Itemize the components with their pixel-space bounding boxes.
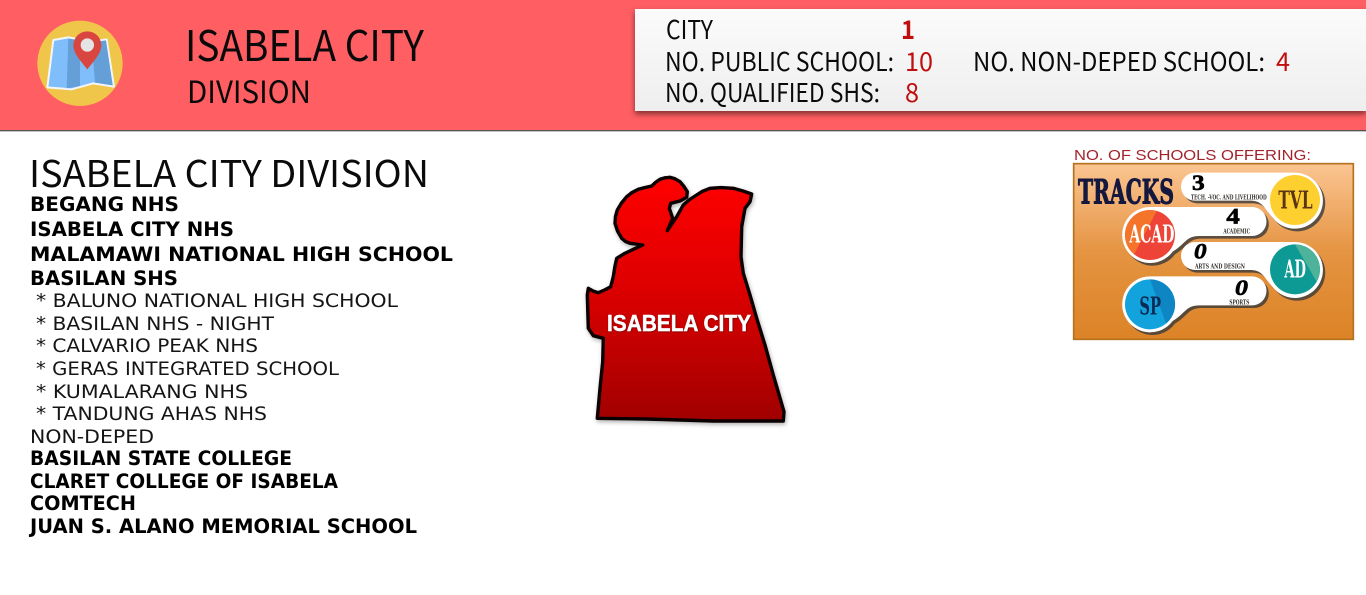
sub-list: Basilan SHS schools (36, 290, 398, 425)
sub-list: Basilan SHS schools: * BALUNO NATIONAL HIGH SCHOOL (36, 290, 398, 312)
heading: Isabela City Division: ISABELA CITY DIVISION (29, 144, 429, 198)
subtitle: Division: DIVISION (187, 67, 311, 112)
icon: map with location pin (37, 21, 123, 106)
track: TVL: TECH. -VOC. AND LIVELIHOOD (1191, 194, 1267, 201)
heading: number of schools offering: NO. OF SCHOOLS OFFERING: (1074, 147, 1311, 164)
list: non-DepEd schools: BASILAN STATE COLLEGE (30, 447, 292, 470)
track: AD: AD (1284, 255, 1306, 284)
list: public schools: ISABELA CITY NHS (30, 218, 234, 241)
stat: non-DepEd schools: NO. NON-DEPED SCHOOL: (973, 42, 1265, 79)
stat: non-DepEd schools: 4 (1276, 42, 1290, 79)
sub-list: Basilan SHS schools: * KUMALARANG NHS (36, 381, 248, 403)
track: TVL: TVL (1278, 185, 1313, 214)
track: SP: 0 (1235, 275, 1248, 300)
stat: city: 1 (901, 10, 915, 47)
sub-list: Basilan SHS schools: * GERAS INTEGRATED SCHOOL (36, 358, 339, 380)
stat: city: CITY (666, 10, 713, 47)
list: public schools (30, 193, 453, 425)
map label: ISABELA CITY (607, 310, 751, 336)
list: non-DepEd schools: JUAN S. ALANO MEMORIAL SCHOOL (28, 515, 417, 538)
list: public schools: BEGANG NHS (30, 193, 179, 216)
stat: city (666, 10, 915, 47)
heading: Tracks: TRACKS (1078, 172, 1174, 211)
track: ACAD: 4 (1226, 203, 1240, 228)
track: AD: 0 (1194, 238, 1207, 263)
track: ACAD: ACAD (1129, 220, 1174, 249)
sub-list: Basilan SHS schools: * BASILAN NHS - NIGHT (36, 313, 274, 335)
track: ACAD (1122, 203, 1269, 266)
track: ACAD: ACADEMIC (1223, 228, 1250, 235)
list: public schools: MALAMAWI NATIONAL HIGH SCHOOL (30, 243, 453, 266)
title: Isabela City: ISABELA CITY (185, 13, 425, 74)
stat: qualified SHS: 8 (905, 73, 919, 110)
stat: qualified SHS: NO. QUALIFIED SHS: (665, 73, 880, 110)
panel: tracks (1074, 164, 1353, 339)
stat: public schools: NO. PUBLIC SCHOOL: (665, 42, 894, 79)
track: TVL (1181, 170, 1325, 231)
track: SP: SPORTS (1229, 299, 1250, 306)
stat: public schools: 10 (905, 42, 933, 79)
list: non-DepEd schools: COMTECH (30, 492, 136, 515)
track: SP: SP (1139, 291, 1161, 320)
list: public schools: BASILAN SHS (30, 267, 178, 290)
track: AD: ARTS AND DESIGN (1194, 263, 1245, 270)
sub-list: Basilan SHS schools: * TANDUNG AHAS NHS (36, 403, 267, 425)
map: Isabela City (587, 177, 784, 421)
list: non-DepEd schools: CLARET COLLEGE OF ISABELA (30, 470, 338, 493)
track: TVL: 3 (1192, 170, 1205, 195)
sub-list: Basilan SHS schools: * CALVARIO PEAK NHS (36, 335, 258, 357)
list: non-DepEd schools (28, 447, 417, 538)
heading: Non-DepEd: NON-DEPED (30, 426, 154, 448)
header band (0, 0, 1366, 132)
panel: division statistics (635, 9, 1366, 111)
track: AD (1181, 238, 1325, 301)
track: SP (1122, 275, 1269, 335)
